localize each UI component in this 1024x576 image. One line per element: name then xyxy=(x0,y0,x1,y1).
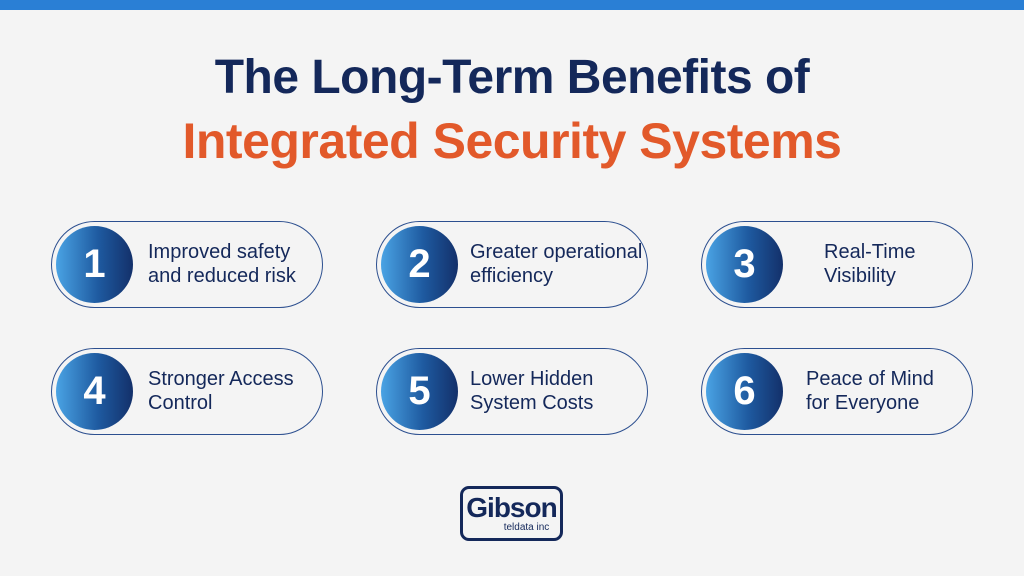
panel: benefit 5: 5 xyxy=(408,369,431,413)
panel: benefit 4 xyxy=(51,348,323,435)
panel: benefit 4: Control xyxy=(148,392,212,414)
panel: benefit 6: Peace of Mind xyxy=(806,368,934,390)
panel: benefit 2: Greater operational xyxy=(470,241,642,263)
panel: benefit 2: 2 xyxy=(408,242,431,286)
logo: Gibson xyxy=(466,492,557,523)
panel: benefit 3: Visibility xyxy=(824,265,896,287)
panel: benefit 1 xyxy=(51,221,323,308)
panel: benefit 2 xyxy=(376,221,648,308)
panel: benefit 5: Lower Hidden xyxy=(470,368,593,390)
panel: benefit 1: 1 xyxy=(83,242,106,286)
panel: benefit 3: 3 xyxy=(733,242,756,286)
panel: benefit 5: System Costs xyxy=(470,392,593,414)
panel: benefit 1: and reduced risk xyxy=(148,265,296,287)
logo xyxy=(460,486,563,541)
logo: teldata inc xyxy=(504,522,549,533)
panel: benefit 3: Real-Time xyxy=(824,241,916,263)
title xyxy=(182,51,842,169)
panel: benefit 6 xyxy=(701,348,973,435)
panel: benefit 1: Improved safety xyxy=(148,241,290,263)
panel: benefit 4: Stronger Access xyxy=(148,368,294,390)
panel: benefit 4: 4 xyxy=(83,369,106,413)
panel: benefit 6: 6 xyxy=(733,369,756,413)
text: The Long-Term Benefits of xyxy=(215,51,809,104)
panel: benefit 5 xyxy=(376,348,648,435)
panel: benefit 3 xyxy=(701,221,973,308)
panel: benefit 6: for Everyone xyxy=(806,392,919,414)
panel: benefit 2: efficiency xyxy=(470,265,553,287)
text: Integrated Security Systems xyxy=(182,113,842,169)
